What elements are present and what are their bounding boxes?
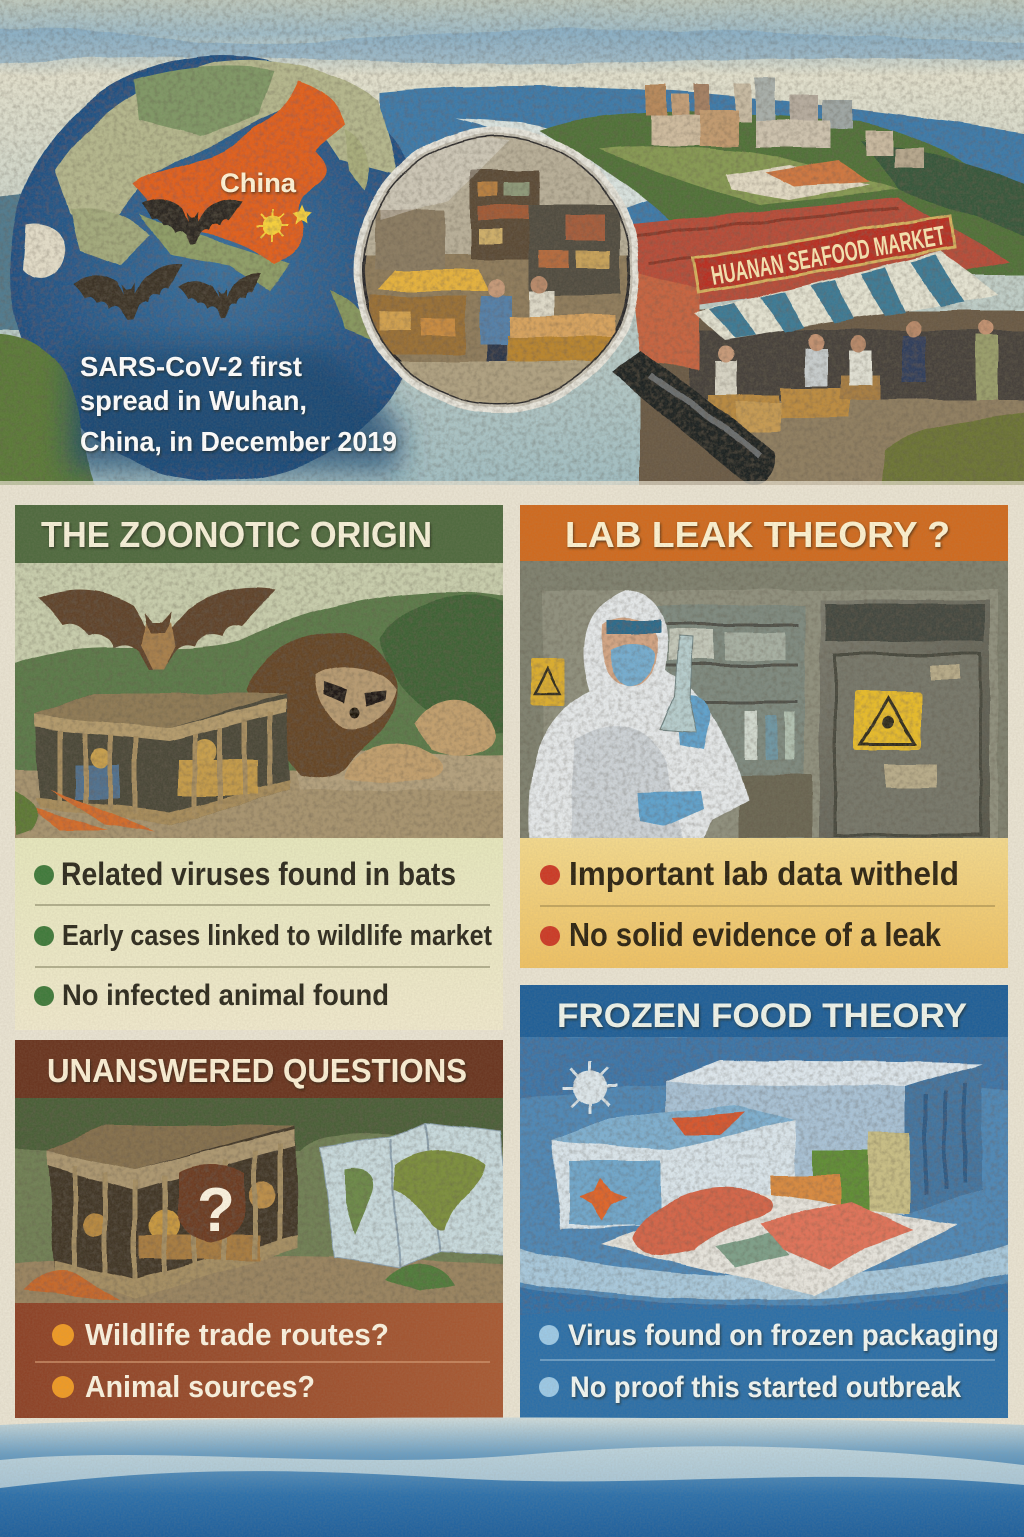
illustration: scientist in protective suit — [510, 550, 1020, 850]
icon: raccoon dog — [246, 632, 397, 778]
handle — [612, 350, 776, 484]
icon: bat lower left — [74, 264, 182, 320]
bullet: no solid evidence: No solid evidence of a leak — [569, 916, 942, 953]
scientist — [529, 590, 748, 850]
bullet: lab data withheld: Important lab data witheld — [569, 855, 959, 892]
globe — [9, 55, 435, 481]
heading: the zoonotic origin: THE ZOONOTIC ORIGIN — [41, 514, 432, 555]
bullet: animal sources: Animal sources? — [85, 1369, 315, 1404]
bullet: wildlife trade routes: Wildlife trade routes? — [85, 1317, 389, 1352]
torn paper edge — [0, 481, 1024, 489]
icon: question mark badge — [178, 1164, 245, 1243]
sea footer — [0, 1418, 1024, 1537]
heading: unanswered questions: UNANSWERED QUESTIONS — [47, 1052, 467, 1089]
hero caption: SARS-CoV-2 first — [80, 351, 302, 382]
icon: bat over China — [143, 200, 242, 244]
bullet list — [15, 838, 503, 1030]
icon: bat — [38, 588, 275, 670]
China map — [133, 80, 346, 265]
heading: unanswered questions — [15, 1040, 503, 1098]
icon: small warning sign — [530, 658, 565, 706]
icon: biohazard warning sign — [854, 691, 921, 750]
icon: cage — [47, 1125, 298, 1298]
Wuhan sun marker — [255, 205, 313, 242]
illustration: frozen container and meat — [510, 1025, 1020, 1325]
heading: lab leak theory — [520, 505, 1008, 561]
foliage and carrots — [25, 1270, 120, 1300]
bullet: no infected animal: No infected animal found — [62, 979, 389, 1012]
tray of meat — [600, 1190, 958, 1295]
hero caption: China, in December 2019 — [80, 426, 397, 457]
panel: the zoonotic origin — [15, 505, 503, 1006]
question mark: ? — [197, 1176, 235, 1245]
icon: virus particle — [573, 1070, 607, 1104]
shipping container — [665, 1060, 982, 1215]
icon: world map — [320, 1122, 513, 1268]
icon: wooden cage — [35, 693, 290, 825]
lab door — [820, 600, 990, 838]
panel: frozen food theory — [510, 985, 1020, 1418]
bullet list — [15, 1303, 503, 1418]
hero caption: spread in Wuhan, — [80, 385, 307, 416]
dark caption backdrop — [70, 350, 400, 470]
China label: China — [220, 168, 297, 198]
panel: lab leak theory — [510, 505, 1020, 968]
illustration: bat, raccoon dog and cage — [15, 563, 503, 838]
painted hero scene — [0, 0, 1024, 510]
packaged goods — [812, 1150, 884, 1218]
hero illustration: origin in Wuhan — [0, 0, 1024, 510]
bullet: related viruses: Related viruses found in bats — [61, 856, 456, 892]
hero caption — [80, 351, 397, 457]
freezer box — [552, 1105, 795, 1230]
panel: unanswered questions — [0, 1040, 520, 1418]
heading: frozen food theory — [520, 985, 1008, 1037]
sacks — [345, 701, 495, 782]
carrots — [25, 790, 155, 832]
heading: frozen food theory: FROZEN FOOD THEORY — [557, 997, 967, 1035]
market building — [620, 198, 1024, 500]
tree foliage lower left — [0, 334, 94, 485]
bullet list — [520, 1309, 1008, 1418]
bullet list — [520, 838, 1008, 968]
icon: bat lower right — [178, 272, 261, 318]
heading: lab leak theory: LAB LEAK THEORY ? — [565, 514, 950, 555]
lens — [357, 130, 637, 410]
heading: the zoonotic origin — [15, 505, 503, 563]
bullet: no proof: No proof this started outbreak — [570, 1371, 961, 1404]
illustration: cage, question mark and map — [0, 1085, 520, 1315]
bullet: early cases: Early cases linked to wildlife market — [62, 920, 492, 952]
foliage lower right — [882, 412, 1024, 485]
bullet: virus on packaging: Virus found on frozen packaging — [568, 1319, 999, 1352]
